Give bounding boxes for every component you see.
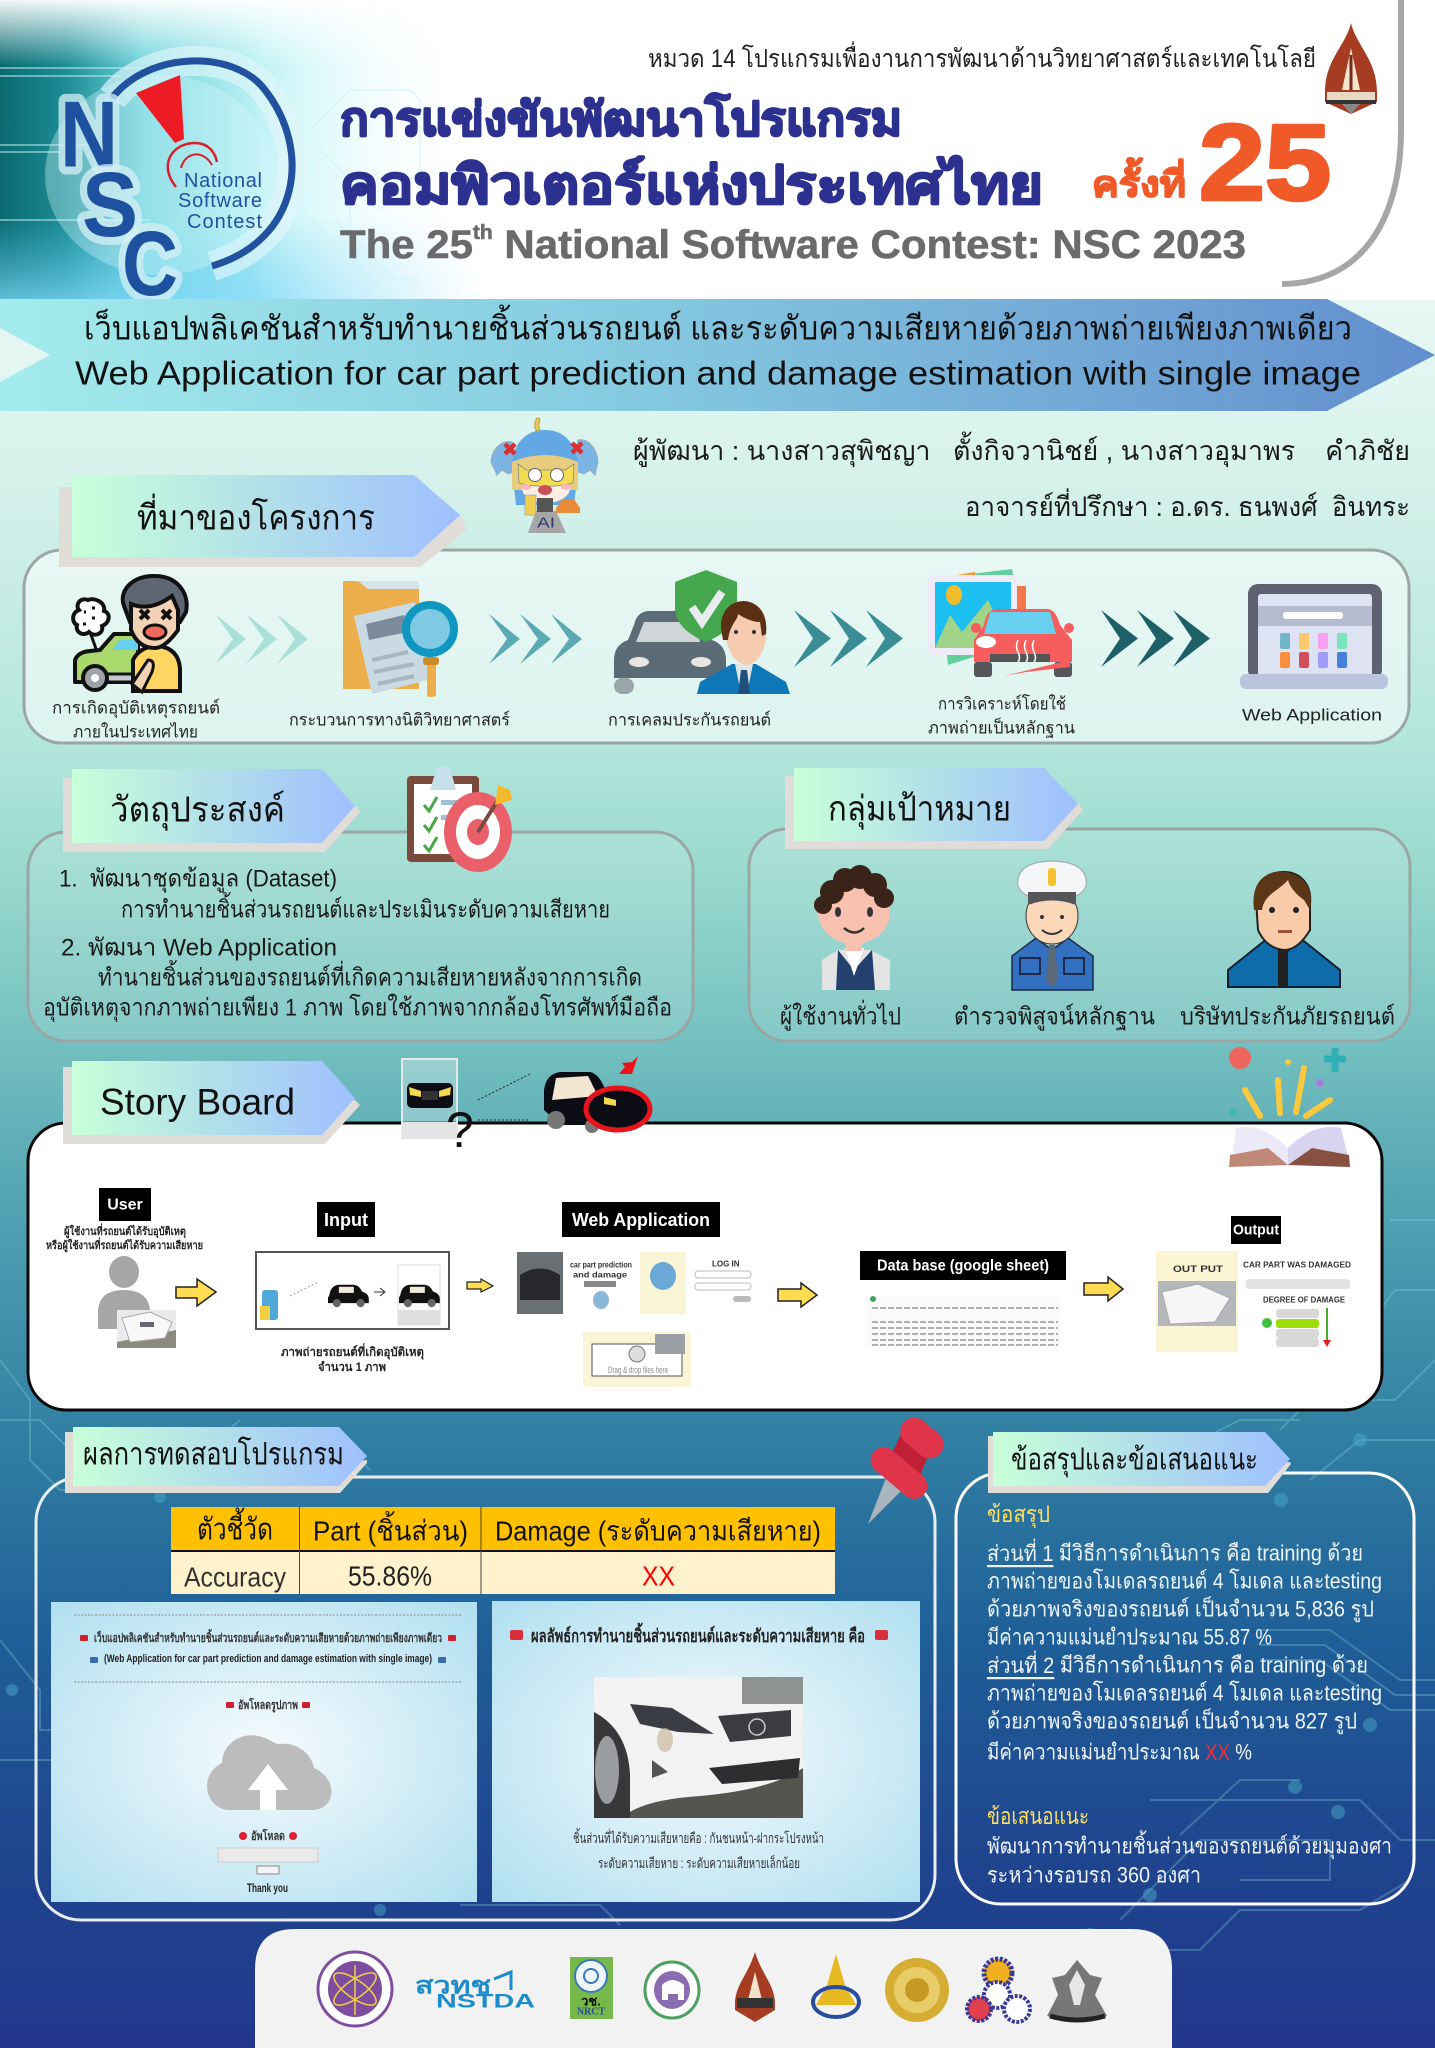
logo: Silpakorn emblem: [1047, 1960, 1107, 2021]
header white area: [0, 0, 1435, 300]
heading: target groups: กลุ่มเป้าหมาย: [828, 790, 1011, 830]
logo: gold circle: [885, 1958, 949, 2022]
NSC logo: Software: [178, 190, 262, 212]
user step: User: [107, 1196, 143, 1214]
suggestions text: ระหว่างรอบรถ 360 องศา: [987, 1862, 1201, 1888]
database step: Data base (google sheet): [877, 1258, 1049, 1274]
user step: ผู้ใช้งานที่รถยนต์ได้รับอุบัติเหตุ: [64, 1223, 186, 1239]
logo: NRCT: วช.: [581, 1994, 601, 2008]
logo: NRCT: NRCT: [577, 2006, 605, 2018]
icon: phone question car: ?: [446, 1102, 474, 1158]
icon: clipboard and target: [407, 767, 512, 872]
arrows 1: [215, 614, 308, 664]
damaged car photo: [594, 1677, 803, 1818]
category line: หมวด 14 โปรแกรมเพื่องานการพัฒนาด้านวิทยาศาสตร์และเทคโนโลยี: [648, 41, 1316, 73]
panel: target groups: [749, 829, 1410, 1041]
output step: CAR PART WAS DAMAGED: [1243, 1260, 1351, 1270]
conclusion text: มีค่าความแม่นยำประมาณ 55.87 %: [987, 1624, 1272, 1650]
developer credits: อาจารย์ที่ปรึกษา : อ.ดร. ธนพงศ์ อินทระ: [965, 488, 1410, 522]
heading: conclusion: ข้อสรุปและข้อเสนอแนะ: [1011, 1444, 1258, 1478]
circuit pattern: [0, 1220, 1435, 1950]
output step: OUT PUT: [1173, 1264, 1224, 1274]
output step: Output: [1233, 1222, 1279, 1238]
developer credits: ผู้พัฒนา : นางสาวสุพิชญา ตั้งกิจวานิชย์ , นางสาวอุมาพร คำภิชัย: [633, 431, 1410, 468]
logo: NSTDA: สวทช: [415, 1972, 491, 2000]
icon: folder and magnifier: [343, 581, 458, 697]
NSC logo: C: [122, 213, 178, 315]
objectives text: ทำนายชิ้นส่วนของรถยนต์ที่เกิดความเสียหายหลังจากการเกิด: [98, 960, 642, 992]
project title ribbon: Web Application for car part prediction and damage estimation with single image: [75, 354, 1361, 392]
logo: KKU: [735, 1952, 775, 2022]
conclusion text: ด้วยภาพจริงของรถยนต์ เป็นจำนวน 827 รูป: [987, 1706, 1357, 1734]
arrows 2: [489, 614, 582, 664]
conclusion text: มีค่าความแม่นยำประมาณ XX %: [987, 1740, 1252, 1764]
screenshot: result page: ระดับความเสียหาย : ระดับความเสียหายเล็กน้อย: [598, 1854, 800, 1871]
heading: test results: ผลการทดสอบโปรแกรม: [83, 1436, 344, 1472]
icon: photo and damaged car: [928, 569, 1074, 677]
arrows 4: [1101, 610, 1210, 667]
heading: test results: [65, 1427, 367, 1493]
step labels: Web Application: [1242, 706, 1382, 724]
user step: [46, 1188, 203, 1348]
target group labels: ผู้ใช้งานทั่วไป: [780, 1000, 901, 1032]
web application step: Drag & drop files here: [608, 1365, 668, 1375]
heading: conclusion: [988, 1432, 1291, 1493]
panel: conclusion: [956, 1473, 1414, 1904]
project title ribbon: [0, 299, 1435, 411]
icon: insurance company: [1228, 872, 1340, 987]
screenshot: upload page: [51, 1602, 477, 1902]
logo: NRCT: [570, 1957, 613, 2019]
output step: DEGREE OF DAMAGE: [1263, 1296, 1346, 1304]
screenshot: upload page: (Web Application for car part prediction and damage estimation with single image): [104, 1653, 432, 1665]
screenshot: upload page: Thank you: [247, 1881, 288, 1895]
developer credits: [633, 431, 1410, 522]
results table: Part (ชิ้นส่วน): [313, 1510, 468, 1546]
step labels: ภายในประเทศไทย: [73, 722, 198, 742]
footer logo strip: [255, 1929, 1172, 2048]
icon: mascot: AI: [537, 514, 555, 532]
step labels: ภาพถ่ายเป็นหลักฐาน: [928, 716, 1075, 738]
conclusion heading: ข้อสรุป: [987, 1501, 1050, 1528]
heading: project background: [59, 475, 467, 567]
panel: objectives: [28, 832, 693, 1041]
objectives text: [43, 866, 672, 1022]
heading: project background: ที่มาของโครงการ: [137, 494, 375, 538]
database step: [860, 1251, 1066, 1346]
web application step: [517, 1202, 751, 1387]
arrow: [176, 1279, 216, 1306]
icon: general user: [814, 865, 894, 990]
screenshot: result page: [492, 1601, 920, 1902]
NSC logo: Contest: [187, 211, 262, 233]
heading: objectives: [63, 769, 360, 852]
title: [340, 92, 1043, 215]
screenshot: upload page: อัพโหลด: [251, 1828, 285, 1843]
logo: elephant seal: [645, 1962, 699, 2018]
heading: story board: Story Board: [100, 1082, 295, 1122]
logo: NSTDA: [415, 1972, 535, 2012]
objectives text: การทำนายชิ้นส่วนรถยนต์และประเมินระดับความเสียหาย: [121, 892, 610, 924]
NSC logo: [45, 61, 292, 315]
suggestions heading: ข้อเสนอแนะ: [987, 1803, 1089, 1829]
screenshot: result page: ชิ้นส่วนที่ได้รับความเสียหายคือ : กันชนหน้า-ฝากระโปรงหน้า: [573, 1828, 824, 1846]
logo: purple seal: [318, 1952, 392, 2026]
edition number: [1092, 102, 1331, 222]
english subtitle: National Software Contest: NSC 2023: [493, 223, 1246, 267]
web application step: LOG IN: [712, 1260, 740, 1268]
NSC logo: S: [82, 154, 138, 256]
results table: Accuracy: [184, 1562, 286, 1592]
web application step: Web Application: [572, 1210, 710, 1230]
results table: Damage (ระดับความเสียหาย): [495, 1516, 821, 1546]
icon: push pin: [865, 1412, 949, 1524]
panel: test results: [36, 1477, 935, 1920]
edition number: 25: [1199, 102, 1331, 222]
icon: phone question car: [402, 1056, 650, 1158]
icon: accident person: [73, 576, 187, 692]
project title ribbon: เว็บแอปพลิเคชันสำหรับทำนายชิ้นส่วนรถยนต์ และระดับความเสียหายด้วยภาพถ่ายเพียงภาพเดียว: [84, 304, 1352, 346]
input step: จำนวน 1 ภาพ: [318, 1360, 386, 1374]
results table: XX: [642, 1560, 675, 1592]
objectives text: อุบัติเหตุจากภาพถ่ายเพียง 1 ภาพ โดยใช้ภาพจากกล้องโทรศัพท์มือถือ: [43, 994, 672, 1022]
screenshot: result page: ผลลัพธ์การทำนายชิ้นส่วนรถยนต์และระดับความเสียหาย คือ: [531, 1622, 865, 1646]
icon: mascot: [491, 418, 598, 533]
screenshot: upload page: เว็บแอปพลิเคชันสำหรับทำนายชิ้นส่วนรถยนต์และระดับความเสียหายด้วยภาพถ่ายเพียงภาพเดียว: [94, 1628, 442, 1645]
title: การแข่งขันพัฒนาโปรแกรม: [340, 92, 902, 145]
input step: Input: [324, 1210, 368, 1230]
conclusion text: ภาพถ่ายของโมเดลรถยนต์ 4 โมเดล และtesting: [987, 1568, 1382, 1594]
target group labels: บริษัทประกันภัยรถยนต์: [1180, 1002, 1395, 1030]
step labels: การเกิดอุบัติเหตุรถยนต์: [52, 698, 220, 718]
step labels: กระบวนการทางนิติวิทยาศาสตร์: [289, 710, 510, 730]
conclusion text: [987, 1538, 1382, 1764]
icon: police officer: [1012, 861, 1093, 990]
icon: insurance claim: [614, 570, 790, 694]
target group labels: [780, 1000, 1395, 1032]
objectives text: 1. พัฒนาชุดข้อมูล (Dataset): [59, 866, 337, 894]
header technology background: [0, 0, 480, 300]
conclusion text: ส่วนที่ 2 มีวิธีการดำเนินการ คือ training ด้วย: [987, 1650, 1368, 1678]
english subtitle: th: [473, 222, 493, 244]
NSC logo: N: [60, 82, 118, 186]
arrow: [467, 1279, 493, 1292]
title: คอมพิวเตอร์แห่งประเทศไทย: [340, 155, 1043, 215]
input step: ภาพถ่ายรถยนต์ที่เกิดอุบัติเหตุ: [281, 1343, 424, 1360]
screenshot: upload page: อัพโหลดรูปภาพ: [238, 1697, 298, 1713]
web application step: and damage: [573, 1270, 628, 1280]
logo: NSTDA: NSTDA: [436, 1992, 535, 2012]
arrow: [1084, 1277, 1123, 1301]
heading: story board: [63, 1061, 360, 1144]
web application step: car part prediction: [570, 1260, 632, 1270]
step labels: การวิเคราะห์โดยใช้: [938, 694, 1066, 714]
panel: story board: [28, 1123, 1382, 1410]
step labels: การเคลมประกันรถยนต์: [608, 710, 771, 730]
logo: gold temple: [813, 1954, 859, 2017]
user step: หรือผู้ใช้งานที่รถยนต์ได้รับความเสียหาย: [46, 1237, 203, 1253]
edition number: ครั้งที่: [1092, 158, 1186, 204]
heading: objectives: วัตถุประสงค์: [110, 790, 285, 830]
arrows 3: [794, 610, 903, 667]
target group labels: ตำรวจพิสูจน์หลักฐาน: [954, 1002, 1155, 1032]
output step: [1156, 1216, 1351, 1352]
results table: 55.86%: [348, 1560, 432, 1592]
icon: laptop: [1240, 584, 1388, 689]
logo: gears: [967, 1959, 1030, 2022]
icon: KKU emblem: [1325, 23, 1377, 114]
NSC logo: National: [184, 170, 262, 192]
conclusion text: ภาพถ่ายของโมเดลรถยนต์ 4 โมเดล และtesting: [987, 1680, 1382, 1706]
header corner curve: [1282, 0, 1401, 284]
icon: book and sparks: [1229, 1047, 1350, 1167]
results table: ตัวชี้วัด: [197, 1508, 273, 1546]
conclusion text: ส่วนที่ 1 มีวิธีการดำเนินการ คือ training ด้วย: [987, 1538, 1363, 1566]
arrow: [778, 1283, 817, 1307]
suggestions text: [987, 1830, 1392, 1888]
objectives text: 2. พัฒนา Web Application: [61, 934, 337, 962]
english subtitle: The 25: [340, 223, 467, 267]
panel: project background: [24, 550, 1409, 743]
conclusion text: ด้วยภาพจริงของรถยนต์ เป็นจำนวน 5,836 รูป: [987, 1594, 1374, 1622]
heading: target groups: [785, 768, 1083, 849]
results table: [171, 1507, 835, 1594]
step labels: [52, 694, 1382, 742]
input step: [256, 1202, 449, 1374]
